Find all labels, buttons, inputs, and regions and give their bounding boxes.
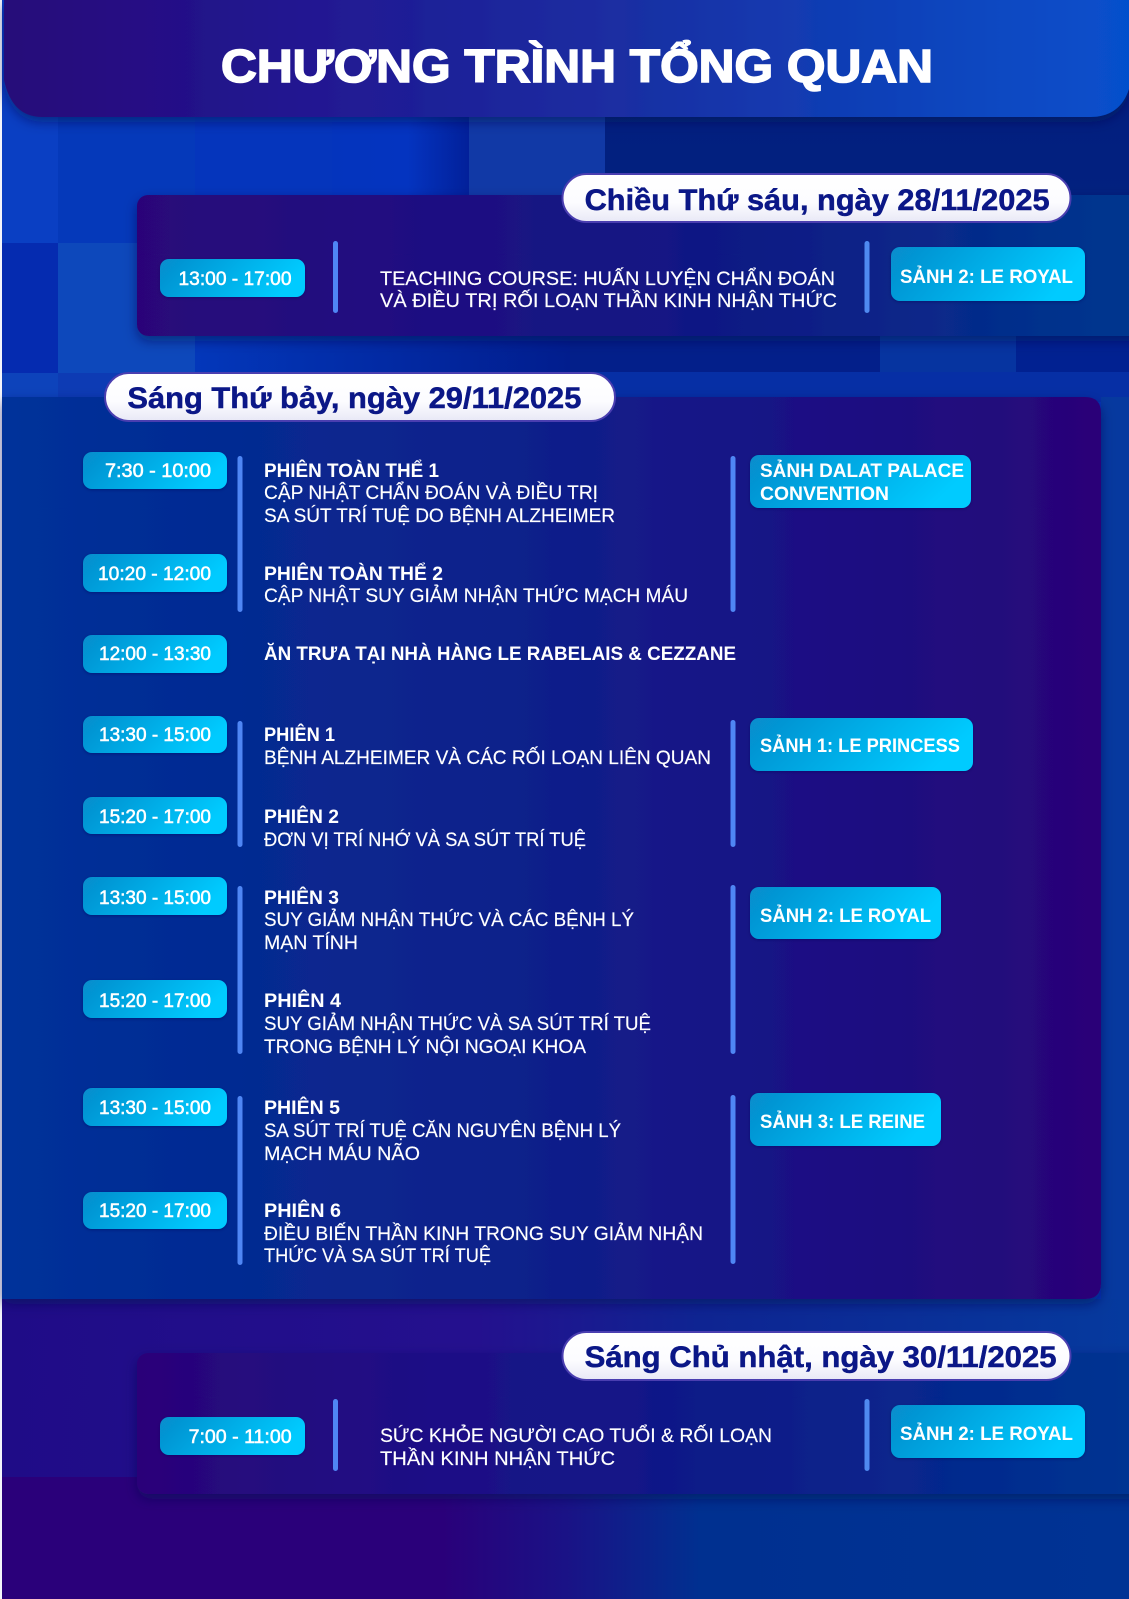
hall chip: Dalat Palace [750,455,971,508]
session: Phiên toàn thể 1 [264,460,615,527]
session: Phiên 5 [264,1097,621,1165]
panel: Saturday [2,397,1101,1299]
panel: Friday afternoon [137,195,1129,336]
session text: elderly health [380,1425,772,1470]
hall chip: Le Royal [750,887,941,939]
session: Phiên 4 [264,990,651,1058]
session: Phiên 5: PHIÊN 5 [264,1097,340,1119]
time chip: 7:00 - 11:00 [160,1417,305,1455]
session: Phiên 4: SUY GIẢM NHẬN THỨC VÀ SA SÚT TRÍ TUỆ [264,1013,651,1035]
hall chip: Sảnh 2 [891,1405,1085,1458]
hall chip: Le Reine [750,1093,941,1146]
session: Phiên 5: MẠCH MÁU NÃO [264,1143,420,1165]
date pill: Friday: Chiều Thứ sáu, ngày 28/11/2025 [585,184,1050,217]
session: Phiên 3: SUY GIẢM NHẬN THỨC VÀ CÁC BỆNH LÝ [264,909,634,931]
hall chip: Sảnh 2: SẢNH 2: LE ROYAL [900,1423,1073,1445]
time chips: Saturday: 12:00 - 13:30 [99,643,211,665]
time chips: Saturday: 13:30 - 15:00 [99,1097,211,1119]
session: Phiên 6: THỨC VÀ SA SÚT TRÍ TUỆ [264,1245,491,1267]
panel: Sunday morning [137,1353,1129,1494]
title: CHƯƠNG TRÌNH TỔNG QUAN [221,40,933,92]
hall chip: Le Royal: SẢNH 2: LE ROYAL [760,905,931,927]
time chip: 13:00 - 17:00: 13:00 - 17:00 [178,268,292,290]
session text: teaching course: VÀ ĐIỀU TRỊ RỐI LOẠN THẦN KINH NHẬN THỨC [380,290,837,312]
hall chip: Dalat Palace: CONVENTION [760,484,889,505]
session text: elderly health: THẦN KINH NHẬN THỨC [380,1448,615,1470]
time chips: Saturday: 13:30 - 15:00 [99,724,211,746]
date pill: Saturday: Sáng Thứ bảy, ngày 29/11/2025 [127,382,581,415]
hall chip: Le Princess: SẢNH 1: LE PRINCESS [760,735,960,757]
time chips: Saturday [83,452,227,1229]
hall chip: Le Princess [750,718,973,771]
session: Phiên 3: PHIÊN 3 [264,887,339,909]
timeline bars: Saturday [238,456,736,1265]
session text: teaching course: TEACHING COURSE: HUẤN LUYỆN CHẨN ĐOÁN [380,268,835,290]
session: Phiên 6: PHIÊN 6 [264,1200,341,1222]
session: Phiên 1: PHIÊN 1 [264,724,335,746]
hall chip: Sảnh 2: SẢNH 2: LE ROYAL [900,266,1073,288]
session: Phiên 6: ĐIỀU BIẾN THẦN KINH TRONG SUY GIẢM NHẬN [264,1223,703,1245]
session: Phiên 3 [264,887,634,954]
hall chip: Dalat Palace: SẢNH DALAT PALACE [760,460,964,482]
hall chip: Le Reine: SẢNH 3: LE REINE [760,1111,925,1133]
time chip: 7:00 - 11:00: 7:00 - 11:00 [189,1426,292,1448]
session: Phiên 4: PHIÊN 4 [264,990,341,1012]
session: Phiên toàn thể 1: PHIÊN TOÀN THỂ 1 [264,460,439,482]
time chip: 13:00 - 17:00 [160,259,305,297]
session: Phiên toàn thể 2: PHIÊN TOÀN THỂ 2 [264,563,443,585]
date pill: Sunday [562,1332,1070,1380]
session: Phiên 2: PHIÊN 2 [264,806,339,828]
session: Phiên 3: MẠN TÍNH [264,933,358,954]
time chips: Saturday: 7:30 - 10:00 [105,460,211,482]
time chips: Saturday: 15:20 - 17:00 [99,1200,211,1222]
session: Phiên 2 [264,806,586,851]
header banner [4,0,1129,117]
session text: teaching course [380,268,837,312]
session: Phiên toàn thể 1: SA SÚT TRÍ TUỆ DO BỆNH ALZHEIMER [264,505,615,527]
session: Phiên 5: SA SÚT TRÍ TUỆ CĂN NGUYÊN BỆNH LÝ [264,1120,621,1142]
session: Phiên toàn thể 1: CẬP NHẬT CHẨN ĐOÁN VÀ ĐIỀU TRỊ [264,482,598,504]
session text: elderly health: SỨC KHỎE NGƯỜI CAO TUỔI & RỐI LOẠN [380,1425,772,1447]
time chips: Saturday: 15:20 - 17:00 [99,990,211,1012]
session: Phiên 2: ĐƠN VỊ TRÍ NHỚ VÀ SA SÚT TRÍ TUỆ [264,829,586,851]
date pill: Saturday [105,373,615,421]
session: Phiên toàn thể 2 [264,563,688,607]
session: Phiên 6 [264,1200,703,1267]
time chips: Saturday: 15:20 - 17:00 [99,806,211,828]
lunch: ĂN TRƯA TẠI NHÀ HÀNG LE RABELAIS & CEZZANE [264,643,736,665]
time chips: Saturday: 10:20 - 12:00 [98,563,211,585]
time chips: Saturday: 13:30 - 15:00 [99,887,211,909]
session: Phiên toàn thể 2: CẬP NHẬT SUY GIẢM NHẬN THỨC MẠCH MÁU [264,585,688,607]
session: Phiên 4: TRONG BỆNH LÝ NỘI NGOẠI KHOA [264,1036,586,1058]
date pill: Sunday: Sáng Chủ nhật, ngày 30/11/2025 [585,1341,1057,1374]
date pill: Friday [562,174,1070,222]
hall chip: Sảnh 2 [891,247,1085,301]
session: Phiên 1: BỆNH ALZHEIMER VÀ CÁC RỐI LOẠN LIÊN QUAN [264,747,711,769]
session: Phiên 1 [264,724,711,769]
